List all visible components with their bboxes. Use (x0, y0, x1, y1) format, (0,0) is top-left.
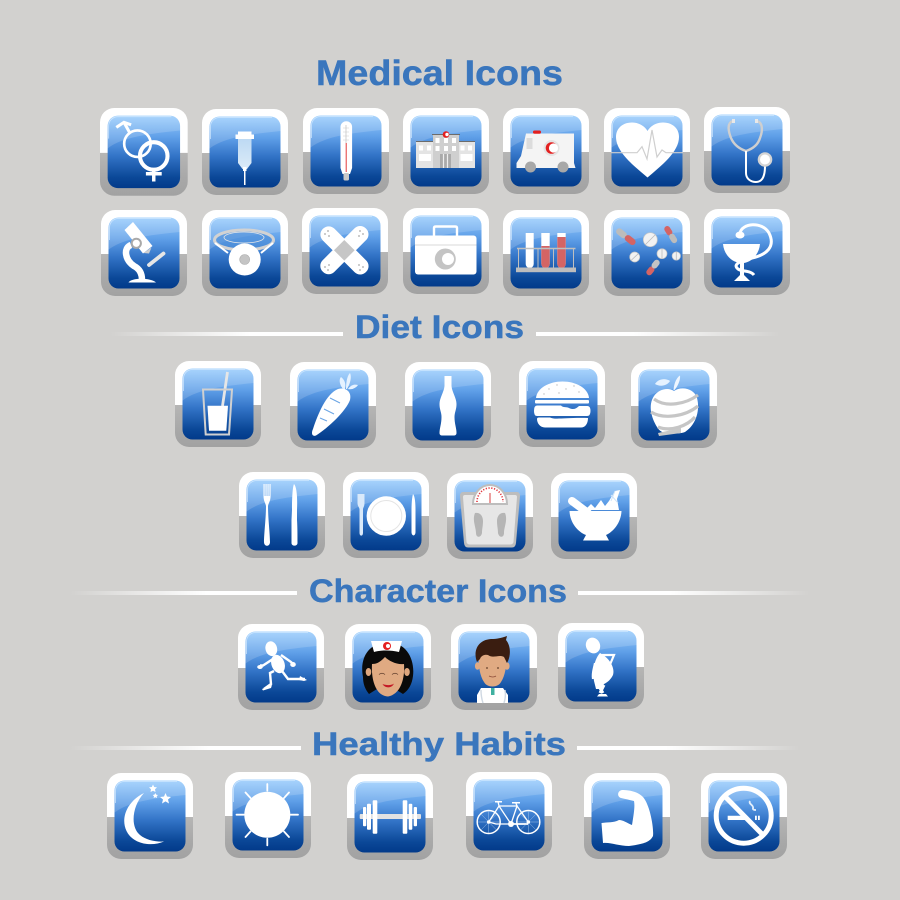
icon: doctor (451, 624, 537, 710)
icon: bandage (302, 208, 388, 294)
icon: syringe (202, 109, 288, 195)
icon: stethoscope (704, 107, 790, 193)
icon: no smoking (701, 773, 787, 859)
icon: glass with straw (175, 361, 261, 447)
icon: bowl of hygieia (704, 209, 790, 295)
icon: dumbbell (347, 774, 433, 860)
icon: moon and stars (107, 773, 193, 859)
heading: Diet Icons: Diet Icons (355, 309, 524, 345)
icon: bottle (405, 362, 491, 448)
section: healthy habits (70, 726, 800, 860)
icon: heart with pulse (604, 108, 690, 194)
icon: pregnant figure (558, 623, 644, 709)
icon: sun (225, 772, 311, 858)
icon: fork and knife (239, 472, 325, 558)
icon: apple with tape (631, 362, 717, 448)
icon: burger (519, 361, 605, 447)
section: character icons (70, 573, 810, 710)
icon: flexed arm muscle (584, 773, 670, 859)
icon: hospital (403, 108, 489, 194)
icon: test tubes (503, 210, 589, 296)
icon: thermometer (303, 108, 389, 194)
icon: runner (238, 624, 324, 710)
icon: plate setting (343, 472, 429, 558)
icon: nurse (345, 624, 431, 710)
icon: head mirror (202, 210, 288, 296)
heading: Character Icons: Character Icons (309, 573, 567, 609)
icon: mortar and herbs (551, 473, 637, 559)
section: medical icons (100, 54, 790, 296)
icon: pills (604, 210, 690, 296)
heading: Medical Icons: Medical Icons (316, 54, 563, 93)
icon: microscope (101, 210, 187, 296)
heading: Healthy Habits: Healthy Habits (312, 726, 566, 762)
section: diet icons (110, 309, 780, 559)
icon: first aid case (403, 208, 489, 294)
icon: weight scale (447, 473, 533, 559)
icon: bicycle (466, 772, 552, 858)
icon: gender symbols (100, 108, 188, 196)
icon: carrot (290, 362, 376, 448)
icon: ambulance (503, 108, 589, 194)
